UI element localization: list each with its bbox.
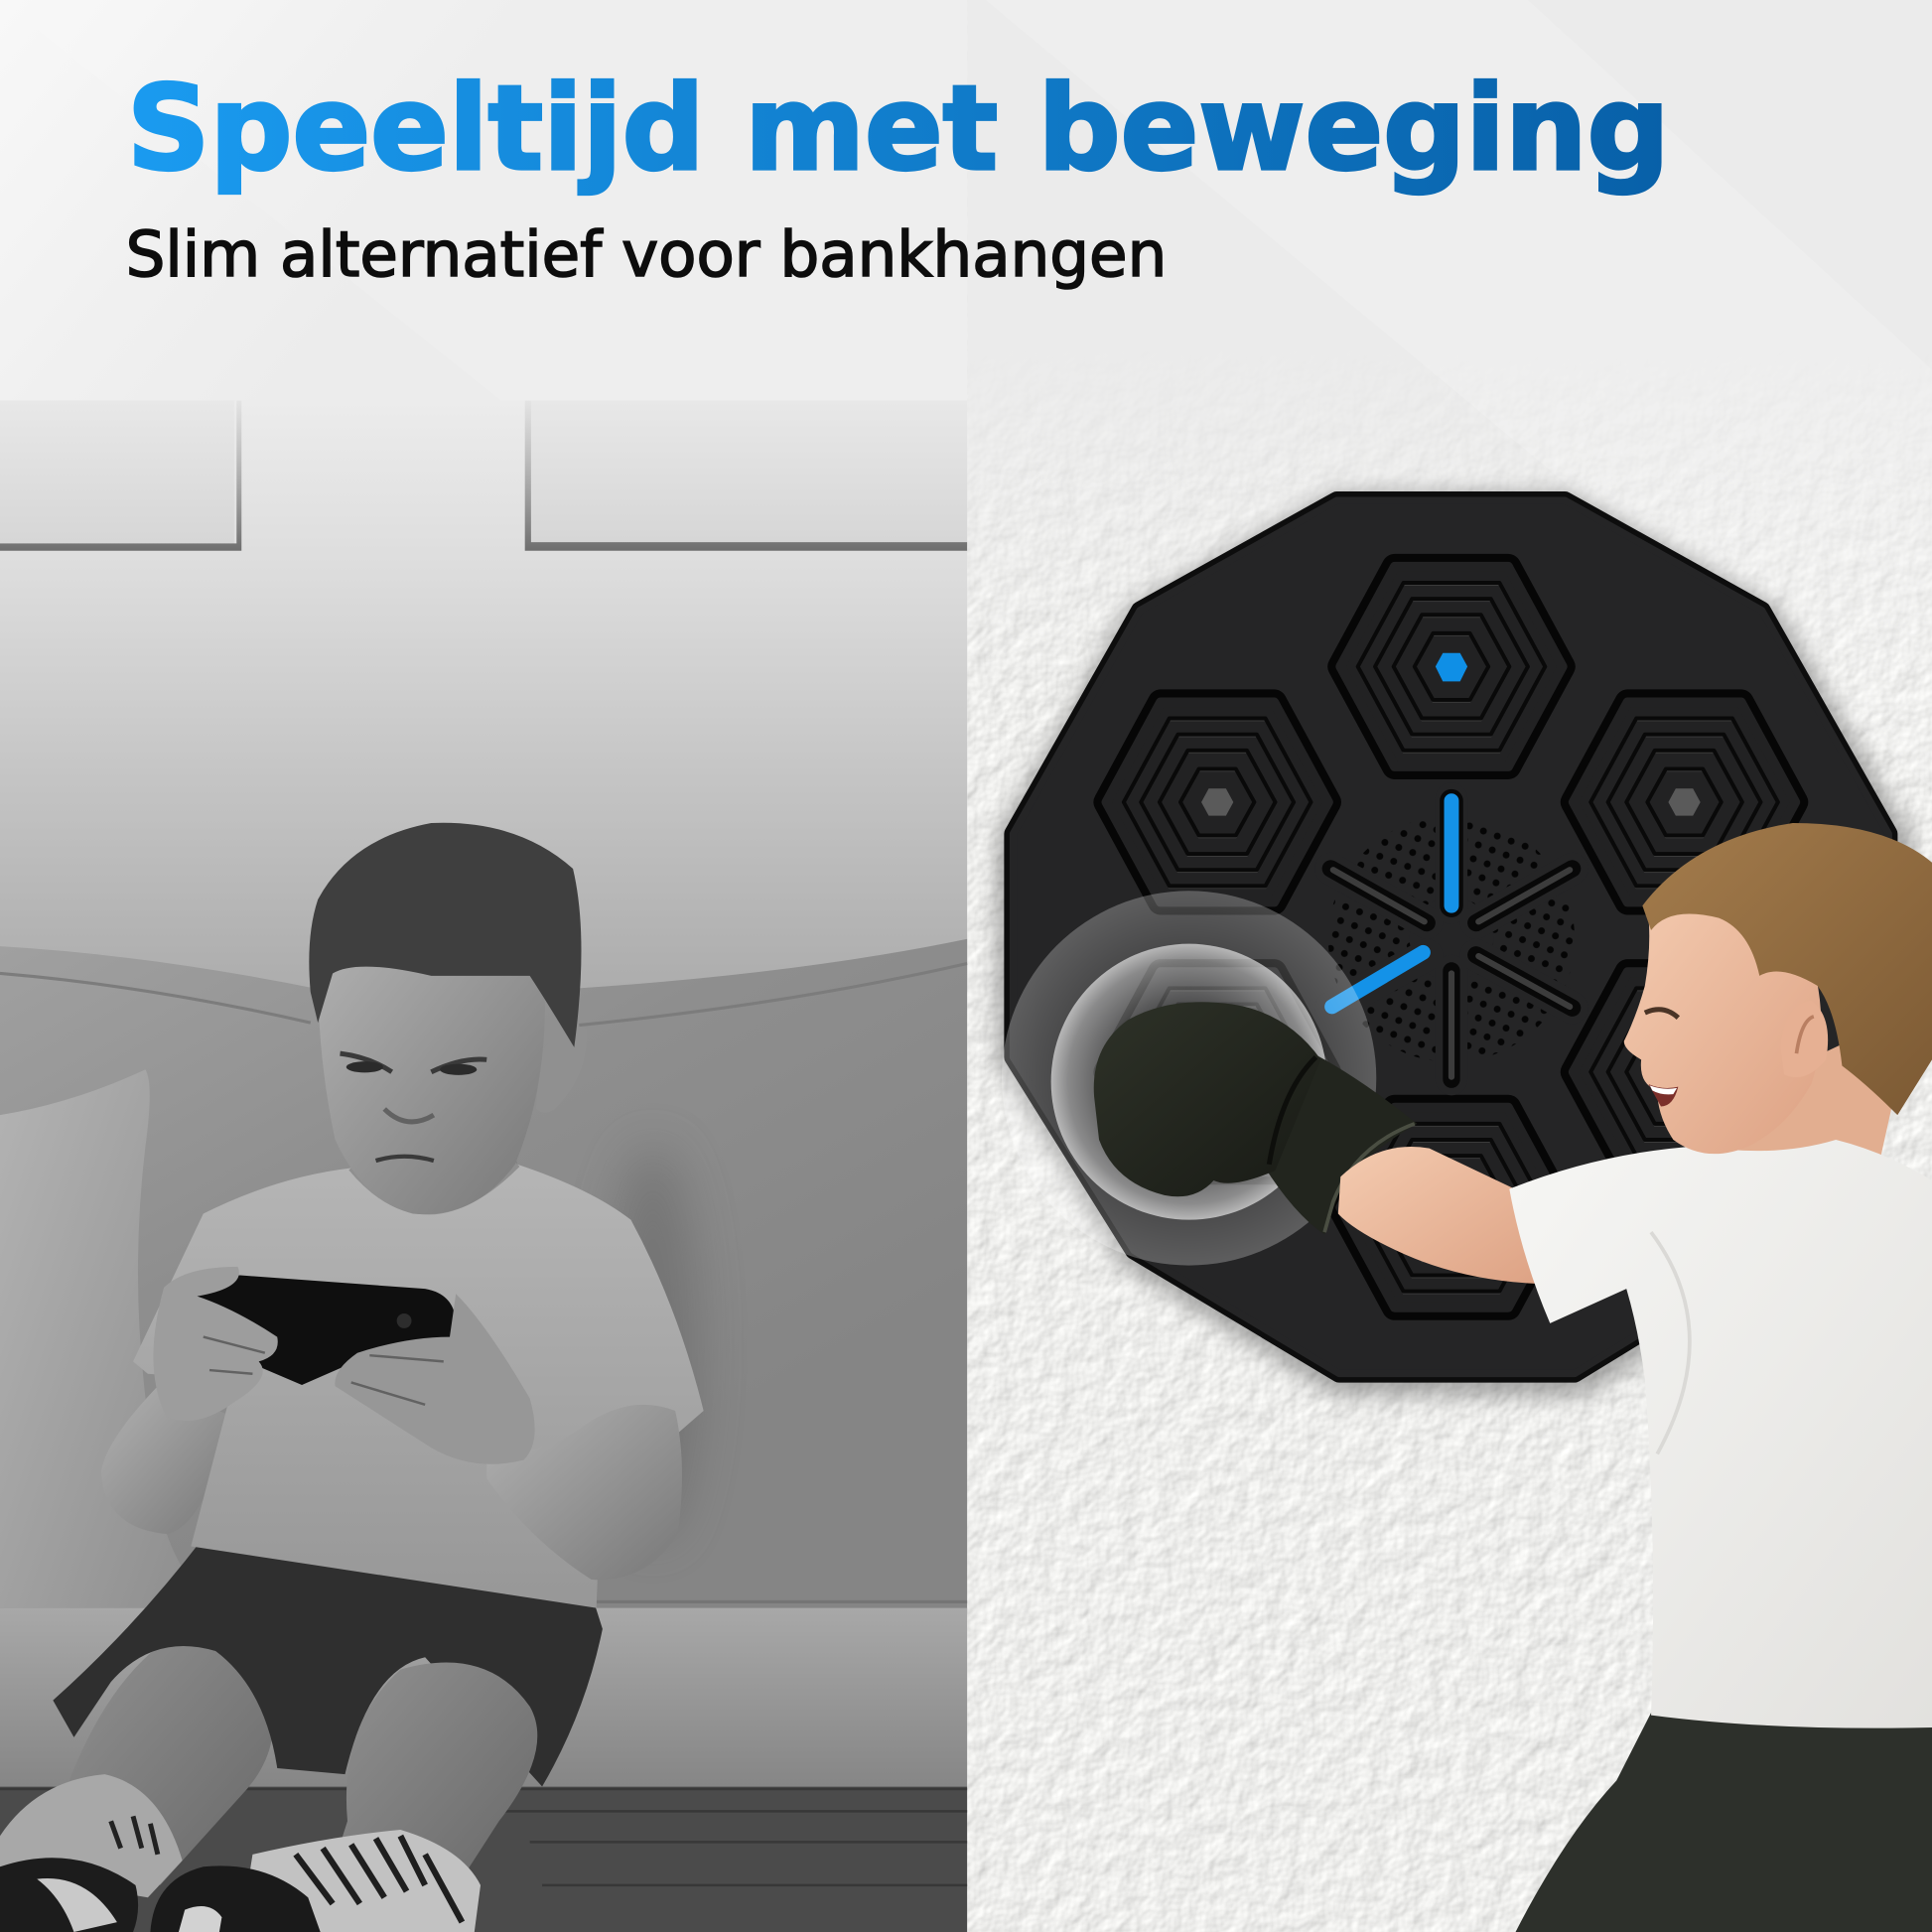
ear inner (1796, 1017, 1814, 1053)
sofa backrest (0, 939, 967, 1614)
dark spoke highlights (1333, 870, 1570, 1077)
neck (1731, 1041, 1891, 1165)
arm (1338, 1147, 1543, 1284)
spoke wells (1330, 798, 1573, 1079)
right hand (335, 1294, 535, 1464)
wood lines (0, 1789, 967, 1885)
dark spokes (1330, 869, 1573, 1079)
right leg (343, 1662, 538, 1868)
shirt fold (1651, 1232, 1690, 1453)
shadow behind boy (610, 1146, 696, 1540)
face (1624, 892, 1821, 1154)
inner ripple (1051, 944, 1327, 1220)
right brow (431, 1059, 486, 1072)
boy punching (1338, 823, 1932, 1932)
board body (1013, 500, 1888, 1374)
hair (1642, 823, 1932, 1115)
left arm behind shirt (101, 1386, 234, 1534)
blue spoke lower left (1332, 952, 1423, 1007)
speaker dots (1328, 816, 1575, 1062)
camera (397, 1313, 412, 1328)
boy (0, 823, 704, 1932)
cuff rim (1324, 1124, 1415, 1232)
wall fade into header (967, 0, 1932, 562)
teeth (1650, 1085, 1677, 1094)
smile (1649, 1084, 1678, 1106)
header streak over wall (986, 0, 1932, 788)
panel: boy on sofa with phone (0, 400, 967, 1932)
board edge (1013, 500, 1888, 1374)
collar (351, 1165, 517, 1211)
picture frame right (525, 400, 967, 551)
shoe highlight (37, 1878, 117, 1932)
shorts (53, 1538, 603, 1787)
board shadow (1001, 496, 1907, 1392)
blue spoke top (1442, 801, 1460, 905)
left brow (341, 1053, 392, 1072)
wall (0, 489, 967, 992)
picture frame right inner (531, 514, 967, 542)
shorts (1516, 1713, 1932, 1932)
picture frame left inner (0, 518, 234, 543)
toe (150, 1865, 321, 1932)
left eye (346, 1061, 383, 1072)
logo (179, 1906, 221, 1932)
glove fist (1094, 1002, 1320, 1196)
subtitle: Slim alternatief voor bankhangen (126, 217, 1167, 291)
left thigh (85, 1646, 272, 1885)
blue centre top (1436, 653, 1467, 681)
outer ripple (1002, 891, 1376, 1266)
pad bottom (1340, 1108, 1563, 1308)
shirt (1509, 1140, 1932, 1728)
wood floor (0, 1787, 967, 1932)
left shoe (0, 1774, 183, 1932)
left hand (153, 1267, 278, 1421)
seat crease (597, 1600, 967, 1603)
ear (536, 1026, 587, 1113)
sock (0, 1774, 183, 1897)
sofa seat (0, 1608, 967, 1787)
board (1013, 500, 1888, 1374)
eye (1645, 1010, 1678, 1018)
stripes (296, 1836, 462, 1922)
nose (384, 1109, 434, 1122)
blue spoke top light (1446, 801, 1457, 905)
hair (309, 823, 581, 1047)
pad lower right (1574, 972, 1795, 1172)
right shoe (150, 1830, 481, 1932)
panel: punch board scene (1001, 496, 1932, 1932)
pad top (1340, 567, 1563, 766)
impact ripple (1002, 891, 1376, 1266)
mouth (376, 1157, 434, 1161)
ear (1780, 1001, 1828, 1077)
finger lines (204, 1337, 444, 1405)
shoe stripes (111, 1816, 158, 1855)
grey centre left (1201, 788, 1233, 816)
phone (194, 1276, 456, 1385)
pad lower left (1106, 972, 1328, 1172)
panel: textured wall with punch board (967, 434, 1932, 1932)
grey centre right (1668, 788, 1701, 816)
pillow (0, 1069, 185, 1608)
title: Speeltijd met beweging (127, 61, 1670, 197)
pad right (1574, 702, 1795, 901)
shoe body (0, 1858, 138, 1932)
shirt (133, 1165, 704, 1608)
picture frame left (0, 400, 241, 551)
boxing glove (1094, 1002, 1417, 1235)
sofa piping (0, 964, 967, 1026)
right arm (486, 1405, 682, 1580)
right eye (440, 1064, 477, 1075)
centre mask (1410, 897, 1493, 981)
glove cuff (1263, 1049, 1417, 1235)
neck (354, 1121, 517, 1209)
face (318, 917, 545, 1214)
seam (1269, 1057, 1315, 1165)
wall texture (967, 454, 1932, 1932)
pad left (1106, 702, 1328, 901)
upper (240, 1830, 481, 1932)
